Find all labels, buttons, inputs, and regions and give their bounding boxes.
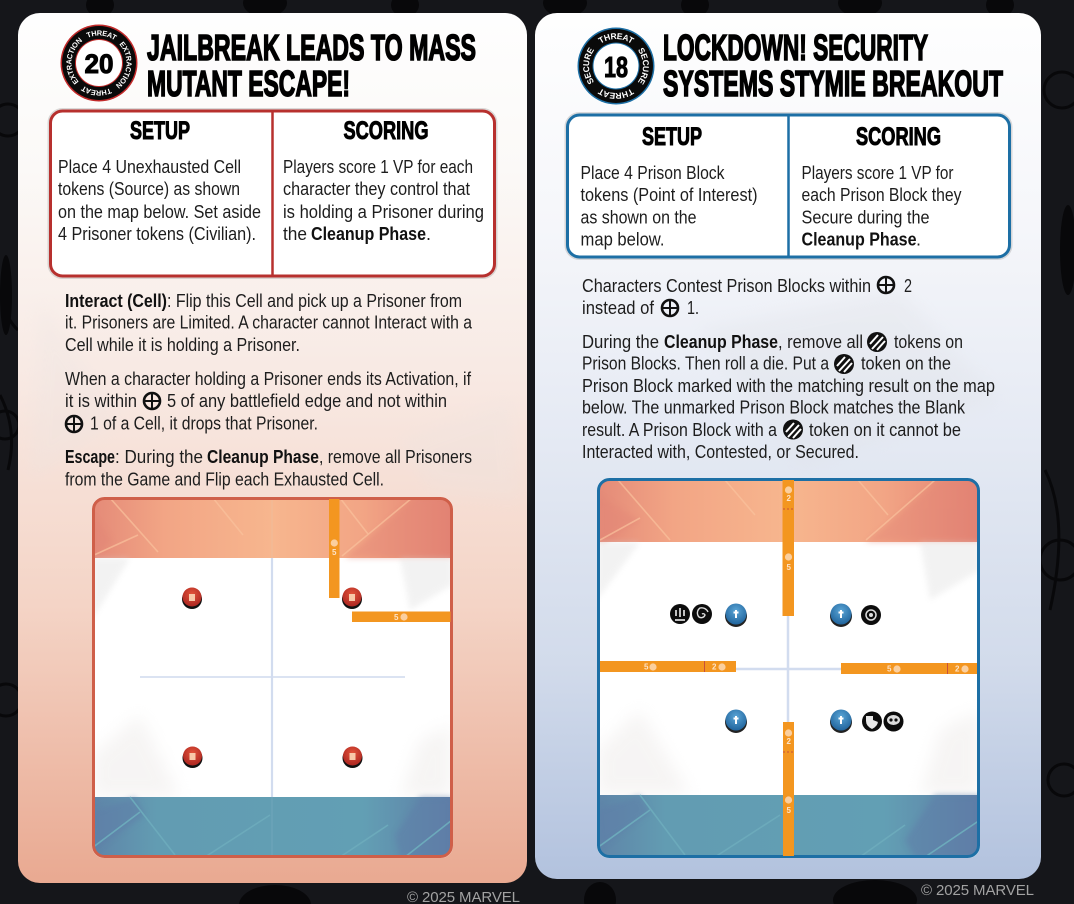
rules text left: : Flip this Cell and pick up a Prisoner from — [167, 291, 462, 311]
rules text left: Interact (Cell) — [65, 291, 167, 311]
scoring text — [802, 163, 962, 250]
heading: setup: SETUP — [130, 117, 190, 145]
scoring text: each Prison Block they — [802, 185, 962, 205]
icon: striped token — [783, 420, 803, 440]
rules text left: it. Prisoners are Limited. A character cannot Interact with a — [65, 312, 473, 332]
die icon: wild spiral — [692, 604, 712, 624]
icon: range target — [661, 299, 679, 317]
scoring text: Players score 1 VP for — [802, 163, 954, 183]
icon: range target — [143, 392, 161, 410]
rules text left: 5 of any battlefield edge and not within — [167, 391, 447, 411]
map right — [597, 478, 980, 858]
terrain bar vertical — [329, 499, 340, 598]
scoring text: . — [426, 224, 431, 244]
card: Jailbreak Leads to Mass Mutant Escape — [18, 13, 527, 883]
rules text left: Cell while it is holding a Prisoner. — [65, 335, 300, 355]
badge label: extraction left: EXTRACTION — [66, 37, 82, 85]
terrain bar bottom: 5 — [786, 806, 792, 815]
threat value 18: 18 — [604, 52, 628, 84]
die icon: critical — [670, 604, 690, 624]
scoring text: Cleanup Phase — [311, 224, 426, 244]
threat badge 18 — [578, 28, 654, 104]
terrain bar left: 2 — [712, 662, 717, 672]
icon: range target — [65, 415, 83, 433]
icon: striped token — [834, 354, 854, 374]
scoring text: the — [283, 224, 307, 244]
rules text left: 1 of a Cell, it drops that Prisoner. — [90, 414, 318, 434]
terrain bar right: 2 — [955, 664, 960, 674]
title right: LOCKDOWN! SECURITY — [663, 27, 928, 68]
rules text right: 1. — [687, 298, 699, 318]
token: cell — [342, 746, 362, 768]
badge label: secure left: SECURE — [583, 47, 594, 84]
scoring text: character they control that — [283, 179, 470, 199]
die icon: hit gear — [861, 605, 881, 625]
rules text right: Prison Block marked with the matching result on the map — [582, 376, 995, 396]
rules text right: token on it cannot be — [809, 420, 961, 440]
title right — [663, 27, 1003, 104]
heading: scoring: SCORING — [344, 117, 428, 145]
icon: striped token — [867, 332, 887, 352]
setup text: 4 Prisoner tokens (Civilian). — [58, 224, 256, 244]
rules text right: below. The unmarked Prison Block matches the Blank — [582, 398, 966, 418]
heading: scoring: SCORING — [856, 123, 941, 151]
terrain bar top: 5 — [786, 563, 792, 572]
terrain bar left — [600, 661, 736, 672]
setup and scoring box left — [50, 111, 494, 276]
setup text: Place 4 Unexhausted Cell — [58, 157, 241, 177]
rules text left: from the Game and Flip each Exhausted Cell. — [65, 470, 384, 490]
threat badge 20 — [60, 24, 138, 102]
badge label: threat bottom: THREAT — [80, 86, 112, 96]
setup text: tokens (Point of Interest) — [580, 185, 758, 205]
rules text right: Interacted with, Contested, or Secured. — [582, 442, 859, 462]
token: cell — [182, 746, 202, 768]
die icon: block shield — [862, 712, 882, 732]
setup text: map below. — [580, 230, 664, 250]
setup text: Place 4 Prison Block — [580, 163, 725, 183]
rules text right: During the — [582, 332, 659, 352]
rules text right: tokens on — [894, 332, 963, 352]
terrain bar horizontal: 5 — [394, 613, 399, 622]
token: prison block — [725, 710, 747, 733]
title left: JAILBREAK LEADS TO MASS — [147, 27, 476, 68]
rules text left: it is within — [65, 391, 137, 411]
copyright right: © 2025 MARVEL — [921, 882, 1034, 899]
rules text left: When a character holding a Prisoner ends its Activation, if — [65, 369, 472, 389]
setup text: tokens (Source) as shown — [58, 179, 240, 199]
badge label: extraction right: EXTRACTION — [116, 41, 132, 89]
setup text: as shown on the — [580, 208, 696, 228]
terrain bar top: 2 — [786, 494, 792, 503]
rules text right: token on the — [861, 354, 951, 374]
rules text right: result. A Prison Block with a — [582, 420, 778, 440]
rules text right — [582, 276, 995, 462]
rules text right: , remove all — [778, 332, 863, 352]
scoring text: Players score 1 VP for each — [283, 157, 473, 177]
token: prison block — [830, 710, 852, 733]
setup text — [580, 163, 758, 250]
scoring text: Secure during the — [802, 208, 930, 228]
card background right — [535, 13, 1041, 879]
rules text left — [65, 291, 473, 490]
scoring text: . — [916, 230, 921, 250]
rules text left: , remove all Prisoners — [319, 447, 472, 467]
badge label: threat top: THREAT — [598, 33, 634, 43]
rules text left: : During the — [115, 447, 203, 467]
rules text right: 2 — [904, 276, 912, 296]
terrain bar vertical: 5 — [332, 548, 337, 557]
setup and scoring box right — [568, 115, 1010, 257]
setup text — [58, 157, 261, 244]
heading: setup: SETUP — [642, 123, 702, 151]
rules text right: Characters Contest Prison Blocks within — [582, 276, 871, 296]
title left: MUTANT ESCAPE! — [147, 63, 350, 104]
rules text left: Cleanup Phase — [207, 447, 319, 467]
token: prison block — [830, 604, 852, 627]
terrain bar bottom — [783, 722, 794, 856]
rules text right: instead of — [582, 298, 655, 318]
card background left — [18, 13, 527, 883]
rules text right: Prison Blocks. Then roll a die. Put a — [582, 354, 830, 374]
threat value 20: 20 — [84, 49, 114, 79]
terrain bar top — [782, 480, 794, 616]
badge label: secure right: SECURE — [638, 48, 649, 85]
card: Lockdown Security Systems Stymie Breakout — [535, 13, 1041, 879]
rules text right: Cleanup Phase — [664, 332, 778, 352]
title left — [147, 27, 476, 104]
token: cell — [181, 587, 203, 609]
die icon: skull — [884, 712, 904, 732]
terrain bar right: 5 — [887, 664, 892, 674]
terrain bar right — [841, 663, 977, 674]
setup text: on the map below. Set aside — [58, 202, 261, 222]
terrain bar bottom: 2 — [786, 737, 792, 746]
map left — [92, 497, 453, 858]
token: prison block — [725, 604, 747, 627]
icon: range target — [877, 276, 895, 294]
scoring text: is holding a Prisoner during — [283, 202, 484, 222]
scoring text: Cleanup Phase — [802, 230, 916, 250]
badge label: threat top: THREAT — [86, 30, 118, 40]
token: cell — [341, 587, 363, 609]
scoring text — [283, 157, 484, 244]
terrain bar horizontal — [352, 612, 450, 622]
rules text left: Escape — [65, 447, 115, 467]
badge label: threat bottom: THREAT — [598, 89, 634, 99]
terrain bar left: 5 — [644, 662, 649, 672]
